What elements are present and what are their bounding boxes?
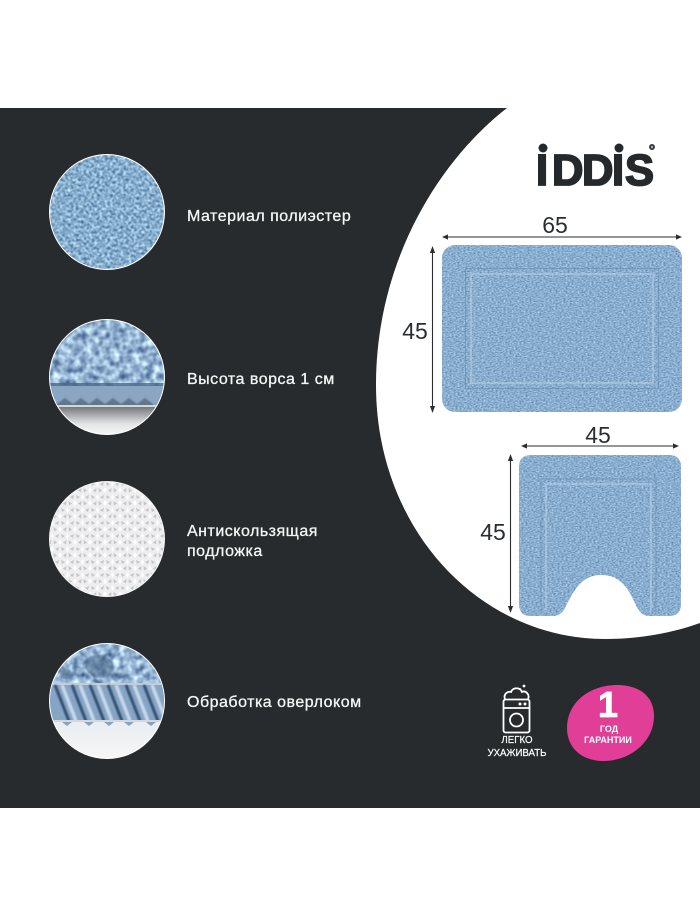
dimension: height 45: 45 <box>480 519 506 545</box>
label: easy care: ЛЕГКО <box>501 735 533 746</box>
label: material: Материал полиэстер <box>187 208 351 225</box>
photo: pile close-up <box>49 154 165 270</box>
warranty number: 1 <box>598 684 618 725</box>
photo: overlock stitching <box>49 643 166 759</box>
dark background panel <box>0 108 700 808</box>
large rectangular mat <box>442 245 682 412</box>
logo: IDDIS: IDDIS <box>536 147 654 195</box>
feature: anti-slip backing <box>49 481 318 597</box>
dimension: width 65: 65 <box>542 212 568 238</box>
dimension: height 45 <box>480 454 513 613</box>
label: anti-slip: Антискользящая <box>187 523 318 540</box>
mat body <box>519 455 681 616</box>
mat inner frame <box>541 479 656 614</box>
dimension: width 45: 45 <box>585 422 611 448</box>
easy care badge <box>487 685 547 759</box>
label: overlock: Обработка оверлоком <box>187 694 362 711</box>
photo: pile side view <box>49 319 165 437</box>
mat inner frame <box>466 268 658 388</box>
warranty badge <box>567 684 654 761</box>
contour toilet mat <box>519 455 681 616</box>
mat body <box>442 245 682 412</box>
easy care badge: УХАЖИВАТЬ <box>487 748 547 759</box>
icon: washing machine <box>504 685 530 732</box>
label: pile height: Высота ворса 1 см <box>187 371 335 388</box>
dimension: width 65 <box>442 212 682 240</box>
feature: material polyester <box>49 154 351 270</box>
warranty badge: ГАРАНТИИ <box>584 735 632 745</box>
feature: pile height <box>49 319 335 437</box>
dimension: width 45 <box>521 422 679 449</box>
warranty label: ГОД <box>600 724 619 734</box>
dimension: height 45 <box>402 246 435 413</box>
photo: backing pattern <box>49 481 165 597</box>
feature: anti-slip backing: подложка <box>187 543 263 560</box>
dimension: height 45: 45 <box>402 318 428 344</box>
pink blob <box>567 685 654 761</box>
feature: overlock edge <box>49 643 362 759</box>
